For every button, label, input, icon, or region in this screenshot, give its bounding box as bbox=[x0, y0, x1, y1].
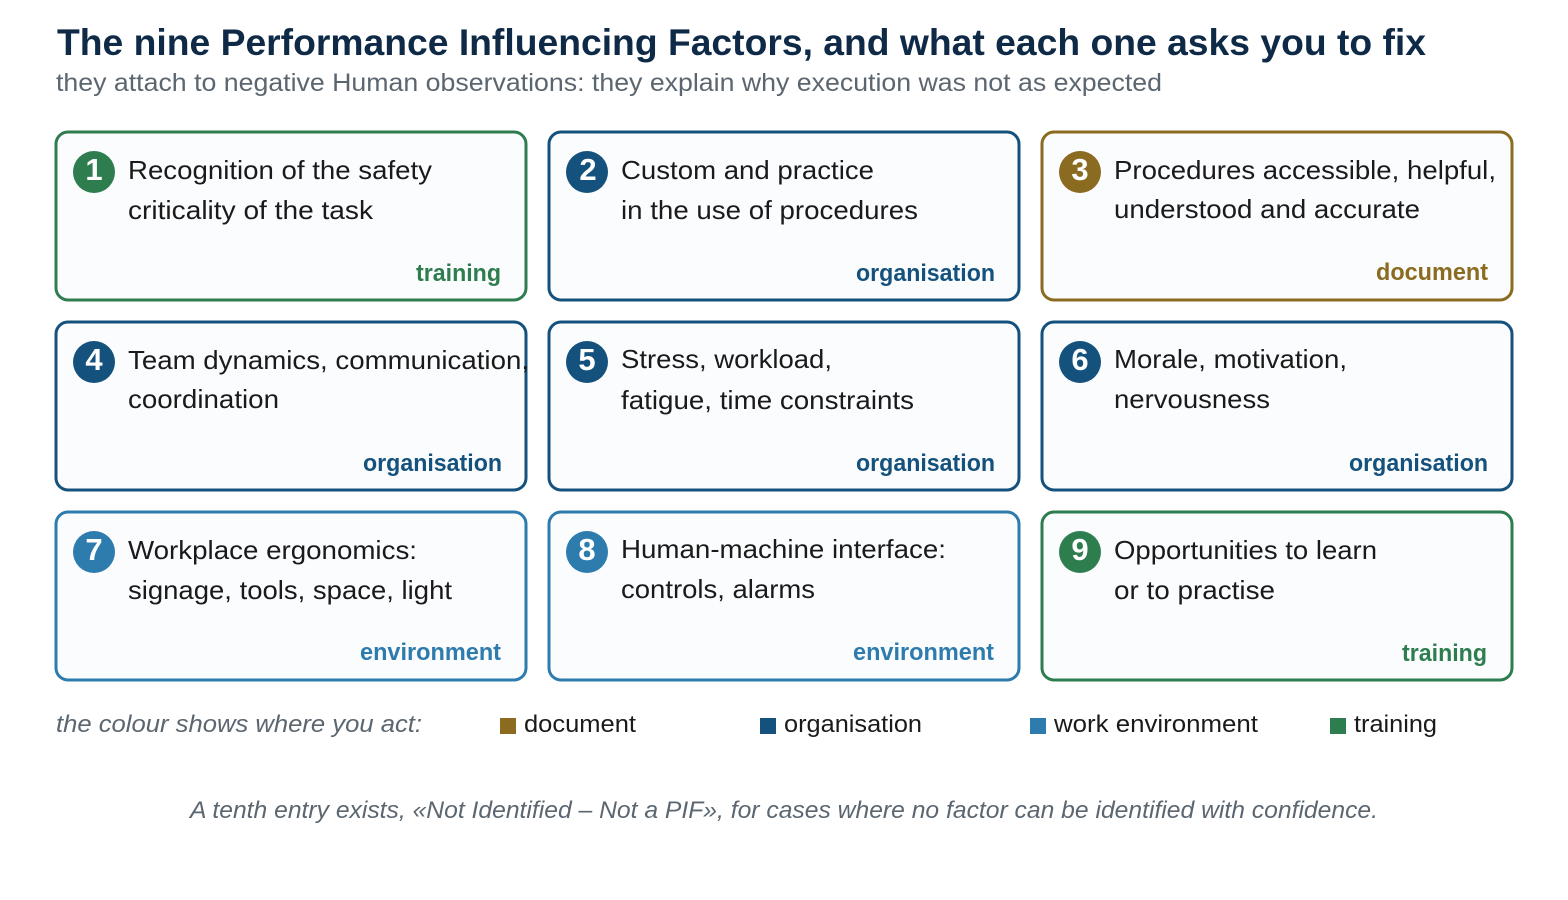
panel: factor 9: training bbox=[1402, 640, 1487, 667]
panel: factor 3: document bbox=[1376, 259, 1488, 286]
panel: factor 7 bbox=[56, 512, 526, 680]
panel: factor 1: 1 bbox=[85, 152, 103, 187]
panel: factor 9: Opportunities to learn bbox=[1114, 535, 1377, 565]
panel: factor 5: 5 bbox=[578, 342, 596, 377]
panel: factor 8: environment bbox=[853, 639, 994, 666]
panel: factor 8: controls, alarms bbox=[621, 574, 815, 604]
panel: factor 9: 9 bbox=[1071, 532, 1089, 567]
legend item: work environment: work environment bbox=[1053, 711, 1258, 738]
panel: factor 3: Procedures accessible, helpful, bbox=[1114, 155, 1496, 185]
panel: factor 5: Stress, workload, bbox=[621, 344, 832, 374]
panel: factor 1: training bbox=[416, 260, 501, 287]
footnote: A tenth entry exists, «Not Identified – Not a PIF», for cases where no factor can be identified with confidence. bbox=[188, 797, 1378, 824]
panel: factor 6 bbox=[1042, 322, 1512, 490]
panel: factor 4: 4 bbox=[85, 342, 103, 377]
panel: factor 9: or to practise bbox=[1114, 575, 1275, 605]
panel: factor 3: 3 bbox=[1071, 152, 1089, 187]
panel: factor 9 bbox=[1042, 512, 1512, 680]
panel: factor 4 bbox=[56, 322, 529, 490]
panel: factor 6: Morale, motivation, bbox=[1114, 344, 1347, 374]
legend item: organisation: organisation bbox=[784, 711, 922, 738]
legend item: document: document bbox=[524, 711, 636, 738]
panel: factor 5 bbox=[549, 322, 1019, 490]
panel: factor 7: signage, tools, space, light bbox=[128, 575, 453, 605]
panel: factor 3 bbox=[1042, 132, 1512, 300]
panel: factor 2: in the use of procedures bbox=[621, 195, 918, 225]
panel: factor 8: 8 bbox=[578, 532, 596, 567]
panel: factor 5: fatigue, time constraints bbox=[621, 385, 914, 415]
panel: factor 4: Team dynamics, communication, bbox=[128, 345, 529, 375]
panel: factor 4: coordination bbox=[128, 384, 279, 414]
panel: factor 2: 2 bbox=[579, 152, 597, 187]
subtitle: they attach to negative Human observations: they explain why execution was not as expected bbox=[56, 69, 1162, 97]
panel: factor 2 bbox=[549, 132, 1019, 300]
legend caption: the colour shows where you act: bbox=[56, 711, 422, 738]
panel: factor 6: nervousness bbox=[1114, 384, 1270, 414]
panel: factor 7: 7 bbox=[85, 532, 103, 567]
title: The nine Performance Influencing Factors, and what each one asks you to fix bbox=[57, 22, 1426, 63]
panel: factor 2: organisation bbox=[856, 260, 995, 287]
panel: factor 5: organisation bbox=[856, 450, 995, 477]
panel: factor 6: organisation bbox=[1349, 450, 1488, 477]
panel: factor 2: Custom and practice bbox=[621, 155, 874, 185]
panel: factor 7: environment bbox=[360, 639, 501, 666]
panel: factor 1: criticality of the task bbox=[128, 195, 374, 225]
legend bbox=[56, 711, 1437, 738]
panel: factor 8 bbox=[549, 512, 1019, 680]
panel: factor 1 bbox=[56, 132, 526, 300]
panel: factor 7: Workplace ergonomics: bbox=[128, 535, 417, 565]
panel: factor 4: organisation bbox=[363, 450, 502, 477]
legend item: training: training bbox=[1354, 711, 1437, 738]
panel: factor 6: 6 bbox=[1071, 342, 1089, 377]
panel: factor 8: Human-machine interface: bbox=[621, 534, 946, 564]
panel: factor 3: understood and accurate bbox=[1114, 194, 1420, 224]
panel: factor 1: Recognition of the safety bbox=[128, 155, 432, 185]
